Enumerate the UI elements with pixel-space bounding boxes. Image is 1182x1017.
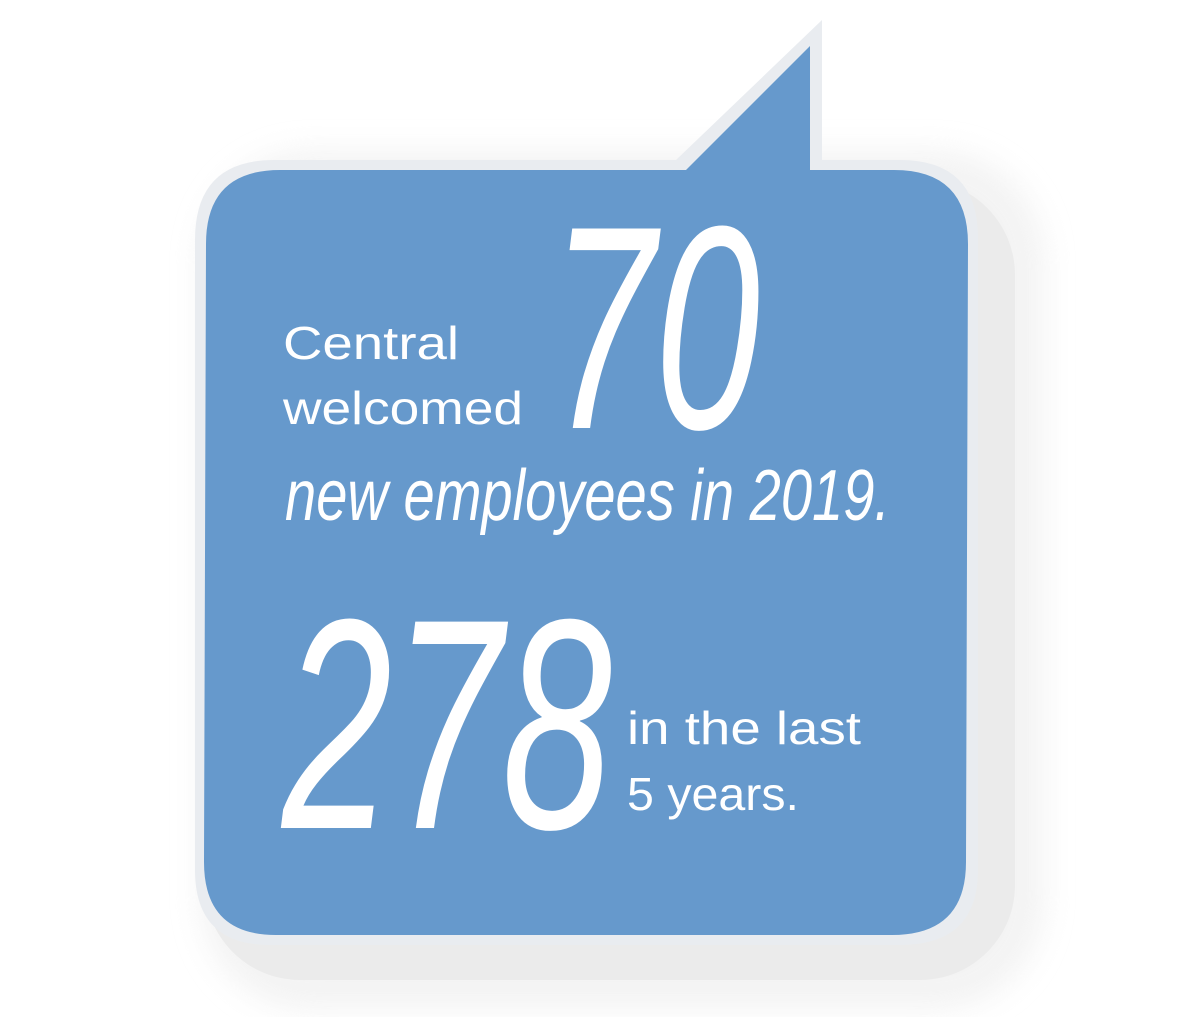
number 70: 70 <box>550 166 761 490</box>
text: in the last 5 years: in the last <box>627 702 861 754</box>
text: Central welcomed <box>282 317 523 434</box>
number 278: 278 <box>279 556 613 892</box>
text: Central welcomed: Central <box>283 317 459 369</box>
speech bubble <box>195 20 978 945</box>
text: in the last 5 years <box>627 702 861 820</box>
text: new employees in 2019.: new employees in 2019. <box>285 456 890 536</box>
text: in the last 5 years: 5 years. <box>627 768 799 820</box>
text: Central welcomed: welcomed <box>282 382 523 434</box>
shadow <box>200 150 1045 1010</box>
